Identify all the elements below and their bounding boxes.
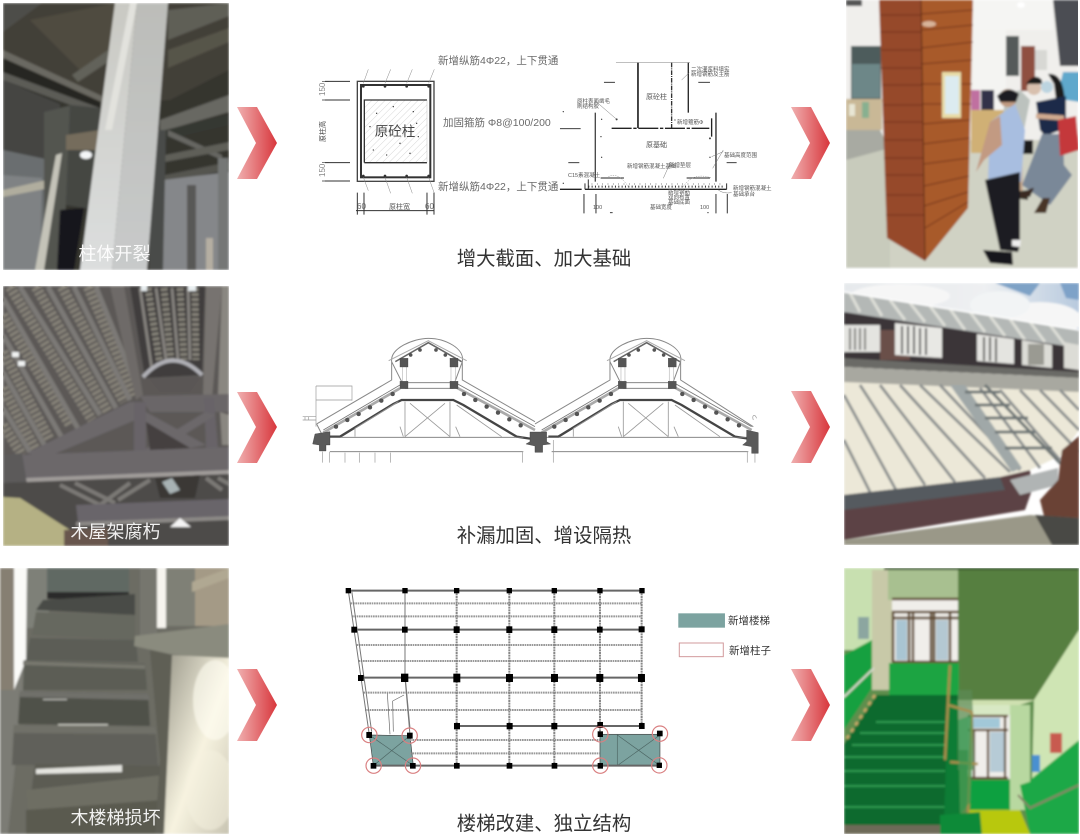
photo: cracked column <box>3 3 229 270</box>
photo caption: timber truss decay: 木屋架腐朽 <box>70 522 160 542</box>
photo: damaged wooden stair <box>0 568 237 834</box>
heading: leak repair and insulation: 补漏加固、增设隔热 <box>457 525 631 547</box>
drawing labels: foundation section: 新增钢筋混凝土基础 <box>627 162 677 170</box>
photo: timber roof truss <box>3 286 229 546</box>
drawing labels: foundation section: 双向布置 <box>668 193 691 201</box>
drawing: enlarged column section <box>322 69 434 215</box>
arrow: left row 1 <box>237 107 277 179</box>
roof supports <box>313 430 758 453</box>
drawing labels: column section: 原柱宽 <box>389 202 410 211</box>
roof module left <box>317 338 535 452</box>
drawing: structural floor plan <box>346 588 725 773</box>
drawing labels: foundation section: 刷结构胶 <box>577 102 600 110</box>
legend swatches <box>678 613 725 628</box>
photo caption: wooden stair damage: 木楼梯损坏 <box>70 808 160 828</box>
new stair fill left <box>369 735 413 766</box>
drawing labels: foundation section: 基础承台 <box>733 190 756 198</box>
drawing labels: foundation section: 新增箍筋Φ <box>677 118 704 126</box>
legend label: new stair: 新增楼梯 <box>728 614 770 627</box>
drawing labels: foundation section: 新增钢筋及主筋 <box>691 70 730 78</box>
drawing labels: foundation section: 二次灌浆料填实 <box>691 65 730 73</box>
drawing labels: foundation section: 基础高度范围 <box>724 151 758 159</box>
drawing labels: foundation section: C15素混凝土 <box>568 171 601 179</box>
drawing labels: column section: 原砼柱 <box>375 124 415 139</box>
arrow: right row 3 <box>791 669 830 741</box>
drawing labels: column section: 150 <box>318 163 327 177</box>
photo caption: column cracking: 柱体开裂 <box>78 244 150 264</box>
arrow: right row 2 <box>791 391 830 463</box>
drawing labels: foundation section: 基础宽度 <box>650 203 673 211</box>
drawing labels: foundation section: 新增垫层 <box>669 161 692 169</box>
drawing labels: foundation section: 新增钢筋 <box>668 188 691 196</box>
section outline <box>357 81 434 181</box>
drawing labels: column section: 60 <box>357 202 366 211</box>
heading: section and foundation: 增大截面、加大基础 <box>457 248 631 270</box>
drawing labels: column section: 新增纵筋4Φ22，上下贯通 <box>438 54 559 67</box>
drawing labels: column section: 60 <box>425 202 434 211</box>
drawing labels: foundation section: 基础底面 <box>668 198 691 206</box>
drawing labels: column section: 新增纵筋4Φ22，上下贯通 <box>438 180 559 193</box>
drawing labels: column section: 150 <box>318 82 327 96</box>
legend label: new column: 新增柱子 <box>729 644 771 657</box>
grid beams <box>348 591 660 766</box>
arrow: left row 2 <box>237 392 277 463</box>
people <box>1002 90 1030 128</box>
drawing labels: column section <box>318 54 559 211</box>
drawing labels: foundation section: 原基础 <box>646 140 667 149</box>
drawing labels: foundation section: 原柱表面凿毛 <box>577 97 611 105</box>
drawing labels: column section: 加固箍筋 Φ8@100/200 <box>443 116 551 129</box>
drawing: enlarged foundation section <box>560 63 737 213</box>
drawing labels: foundation section: 新增钢筋混凝土 <box>733 184 772 192</box>
new column circles <box>362 726 668 773</box>
heading: stair rebuild: 楼梯改建、独立结构 <box>457 813 631 835</box>
arrow: right row 1 <box>791 107 830 179</box>
roof module right <box>535 338 753 452</box>
columns <box>346 588 663 769</box>
arrow: left row 3 <box>237 669 277 741</box>
drawing labels: foundation section <box>568 65 772 211</box>
drawing: twin roof section <box>303 338 758 463</box>
drawing labels: foundation section: 原砼柱 <box>646 92 667 101</box>
photo: repaired metal roof <box>844 283 1080 545</box>
new stair fill right <box>600 734 660 766</box>
drawing labels: foundation section: 100 <box>593 205 602 211</box>
photo: renovated green stair <box>844 568 1079 834</box>
photo: finished timber-clad column <box>844 0 1080 271</box>
drawing labels: column section: 原柱高 <box>318 121 327 142</box>
drawing labels: foundation section: 100 <box>700 205 709 211</box>
